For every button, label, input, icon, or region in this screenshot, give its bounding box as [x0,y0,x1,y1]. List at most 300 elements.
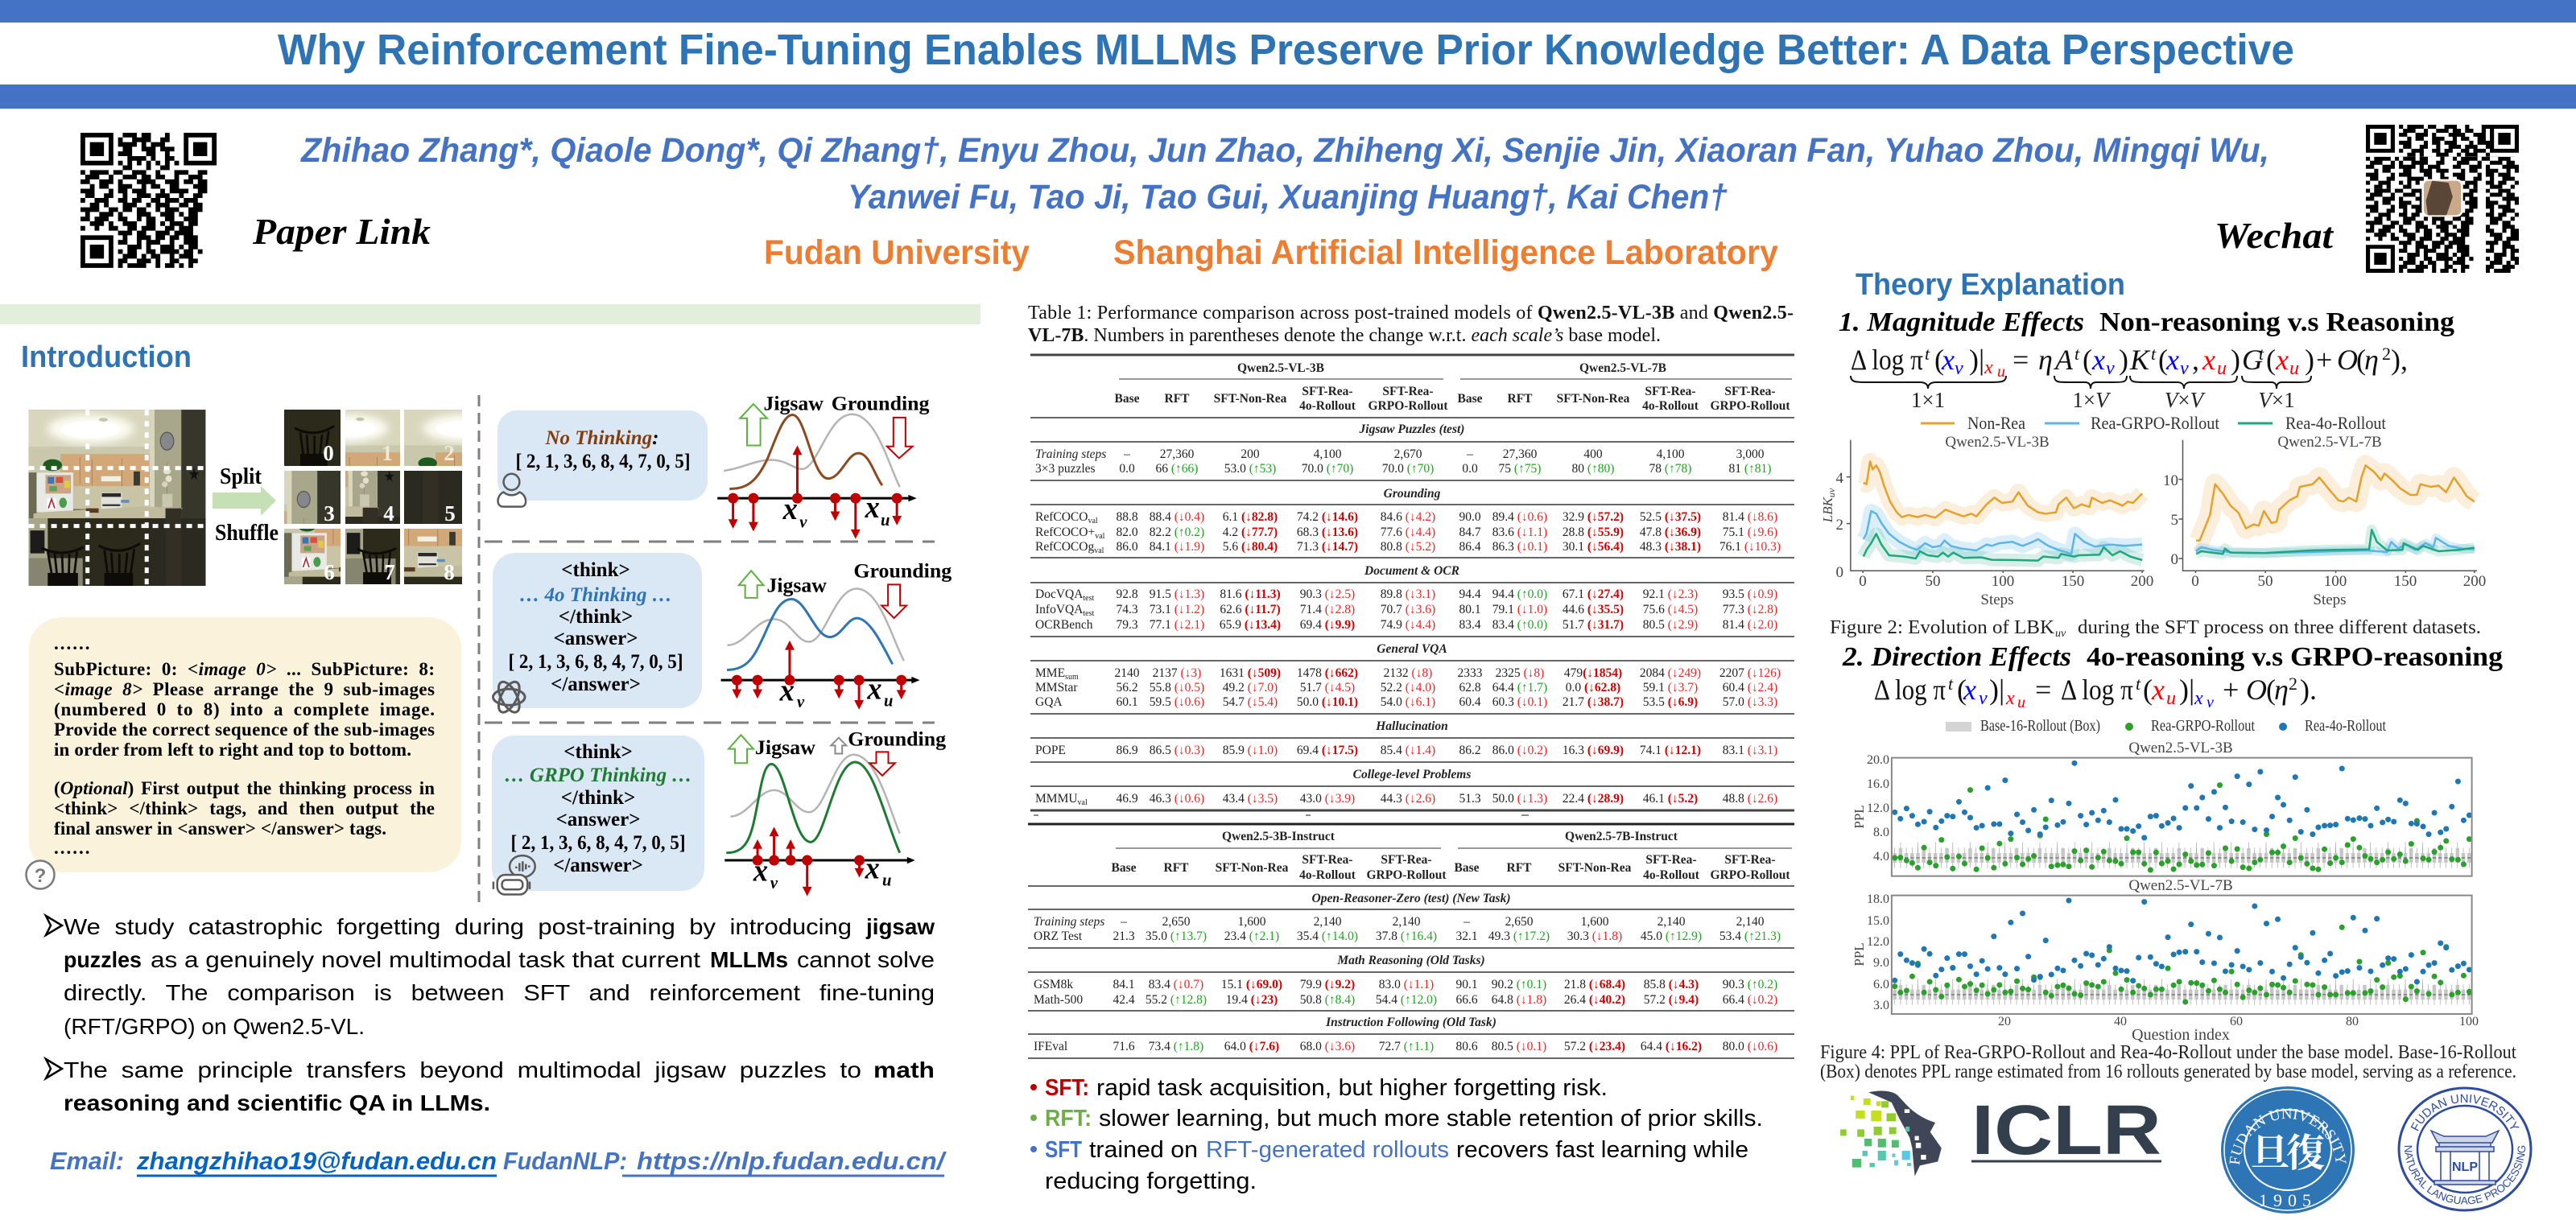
section: grounding: 6.1 (↓82.8) [1223,510,1278,524]
table 2 header: SFT-Rea- [1381,853,1432,867]
section: college-level problems: val [1078,798,1088,807]
intro bullets: MLLMs [710,947,788,972]
icon: question mark [26,861,55,888]
prompt text: Provide the correct sequence of the sub-images [54,719,435,740]
section: document and OCR: 77.3 (↓2.8) [1723,603,1777,616]
section: document and OCR: 94.4 [1459,587,1481,601]
formula: magnitude effects: t [1925,344,1930,364]
section: open-reasoner-zero: 53.4 (↑21.3) [1719,929,1781,943]
formula: direction effects: + [2223,674,2239,706]
image: shuffled puzzle tiles: 0 [323,441,334,465]
intro bullets: cannot solve [797,947,935,972]
chart: PPL Qwen2.5-VL-7B: 12.0 [1867,935,1889,949]
formula: direction effects: = [2035,674,2051,706]
section: college-level problems: 46.3 (↓0.6) [1150,792,1204,806]
section: grounding: 75.1 (↓9.6) [1723,526,1777,539]
section: general VQA: 2333 [1457,666,1483,680]
table header: SFT-Rea- [1382,385,1434,398]
chart: 4o thinking distribution shift: v [797,691,805,711]
intro bullets: math [873,1057,935,1082]
prompt text: in order from left to right and top to bottom. [54,740,411,760]
chart: GRPO thinking distribution shift: u [882,870,892,890]
formula: magnitude effects: x [1941,344,1955,376]
chart: PPL Qwen2.5-VL-3B: 20.0 [1867,753,1889,767]
section: instruction following: 73.4 (↑1.8) [1149,1040,1203,1053]
formula: magnitude effects: ) [2231,344,2240,376]
section: math reasoning: Math Reasoning (Old Tasks) [1336,954,1485,967]
section: instruction following: 80.6 [1455,1040,1478,1053]
section: college-level problems: 46.9 [1116,792,1138,806]
chart: PPL Qwen2.5-VL-7B: 6.0 [1873,978,1889,991]
QR code: wechat [2366,95,2564,273]
section: general VQA: 1478 (↓662) [1297,666,1358,680]
introduction band [0,304,980,324]
section: jigsaw puzzles: 53.0 (↑53) [1224,462,1276,476]
section: college-level problems: College-level Problems [1353,768,1471,781]
section: document and OCR: test [1083,594,1095,603]
formula underbraces and dimensions: 1×V [2072,388,2112,412]
table 2 header: GRPO-Rollout [1710,868,1790,882]
formula: magnitude effects: = [2013,344,2029,376]
formula: magnitude effects: A [2054,344,2074,376]
section: instruction following: 71.6 [1113,1040,1135,1053]
section: open-reasoner-zero: 2,650 [1505,915,1534,929]
prompt text: <think> </think> tags, and then output the [54,798,435,818]
logo: FudanNLP seal: FUDAN UNIVERSITY [2410,1094,2520,1131]
formula: magnitude effects: ( [2083,344,2092,376]
section: hallucination: 86.9 [1116,744,1138,757]
section: grounding: 4.2 (↓77.7) [1223,526,1278,539]
table header: RFT [1164,392,1190,406]
chart: PPL Qwen2.5-VL-3B [1852,740,2472,876]
GRPO thinking text: … GRPO Thinking … [505,765,691,786]
chart: no thinking distribution shift [717,393,929,539]
formula: magnitude effects: v [2180,358,2189,379]
bullet: SFT on RFT rollouts: recovers fast learning while [1456,1137,1748,1163]
chart: no thinking distribution shift: x [865,491,880,525]
section: general VQA: 60.4 [1459,695,1481,709]
section: grounding: val [1094,546,1104,555]
section: jigsaw puzzles: 81 (↑81) [1729,462,1771,476]
contact links [50,1147,947,1177]
section: general VQA: 54.0 (↓6.1) [1381,695,1435,709]
image: shuffled puzzle tiles [171,300,578,641]
chart: LBK evolution Qwen2.5-VL-7B [2163,434,2486,608]
chart: PPL Qwen2.5-VL-7B: 40 [2114,1015,2127,1028]
section: jigsaw puzzles: 400 [1583,447,1603,461]
image: shuffled puzzle tiles: 7 [384,560,395,584]
table 2 header: Base [1454,861,1480,875]
chart: 4o thinking distribution shift: x [866,672,882,707]
image: shuffled puzzle tiles: 6 [324,560,335,584]
chart: GRPO thinking distribution shift: Jigsaw [755,736,815,759]
section: instruction following: 80.0 (↓0.6) [1723,1040,1777,1053]
section: general VQA: 55.8 (↓0.5) [1150,681,1204,694]
logo: Fudan University seal: FUDAN UNIVERSITY [2230,1108,2347,1165]
section: math reasoning: 54.4 (↑12.0) [1376,993,1437,1007]
image: original kitchen photo with split grid [29,410,205,586]
section: grounding: Grounding [1384,487,1441,501]
table 2 header [1111,830,1790,882]
section: grounding: 76.1 (↓10.3) [1719,540,1781,554]
prompt text: (numbered 0 to 8) into a complete image. [54,699,435,719]
panel: GRPO thinking [492,736,704,891]
legend: PPL chart [1946,717,2386,735]
chart: no thinking distribution shift: u [881,509,890,530]
section: instruction following: 57.2 (↓23.4) [1564,1040,1625,1053]
chart: LBK evolution Qwen2.5-VL-7B: 150 [2394,573,2417,590]
section: grounding: 30.1 (↓56.4) [1563,540,1624,554]
heading: magnitude effects [1839,307,2454,337]
table 2 header: Qwen2.5-7B-Instruct [1565,830,1678,843]
figure 2 caption [1830,617,2481,640]
figure 2 caption: during the SFT process on three different datasets. [2078,617,2481,638]
section: open-reasoner-zero: – [1120,915,1127,929]
bullet: SFT: SFT: [1045,1075,1089,1101]
section: document and OCR: 75.6 (↓4.5) [1643,603,1698,616]
section: open-reasoner-zero: 49.3 (↑17.2) [1488,929,1550,943]
section: document and OCR: 80.5 (↓2.9) [1643,618,1698,632]
chart: LBK evolution Qwen2.5-VL-7B: 5 [2170,512,2178,529]
section: jigsaw puzzles: 4,100 [1314,447,1342,461]
formula: magnitude effects: t [2151,344,2157,364]
chart: GRPO thinking distribution shift: x [753,855,768,888]
arrow: split shuffle [213,486,276,516]
table 2 header: RFT [1164,861,1189,875]
section: math reasoning: 55.2 (↑12.8) [1146,993,1207,1007]
formula: magnitude effects: t [2074,344,2080,364]
table 2 header: Qwen2.5-3B-Instruct [1222,830,1335,843]
section: general VQA: 2084 (↓249) [1640,666,1701,680]
paper link label: Paper Link [252,211,431,252]
section: document and OCR: 51.7 (↓31.7) [1563,618,1624,632]
panel: no thinking [497,410,708,501]
icon: question mark: ? [35,865,46,887]
formula: magnitude effects: ( [1934,344,1944,376]
section: grounding: 48.3 (↓38.1) [1640,540,1701,554]
section: jigsaw puzzles: 75 (↑75) [1499,462,1541,476]
table header: SFT-Rea- [1302,385,1353,398]
section: open-reasoner-zero: 1,600 [1581,915,1609,929]
image: shuffled puzzle tiles: 8 [444,560,455,584]
GRPO thinking text: [ 2, 1, 3, 6, 8, 4, 7, 0, 5] [510,832,686,854]
section: open-reasoner-zero: 35.4 (↑14.0) [1297,929,1358,943]
4o thinking text: <answer> [554,628,638,649]
section: college-level problems: MMMU [1035,792,1078,806]
section: math reasoning: 83.0 (↓1.1) [1379,978,1434,991]
section: open-reasoner-zero: 23.4 (↑2.1) [1224,929,1279,943]
section: math reasoning [1034,954,1777,1007]
section: jigsaw puzzles: 27,360 [1503,447,1538,461]
bullet: SFT on RFT rollouts: RFT-generated rollouts [1206,1137,1449,1163]
section: math reasoning: 90.1 [1455,978,1478,991]
no thinking text: No Thinking: [544,427,659,449]
formula: magnitude effects: x [2091,344,2105,376]
formula: direction effects: ). [2300,674,2317,706]
section: open-reasoner-zero: 30.3 (↓1.8) [1567,929,1622,943]
bullet: SFT on RFT rollouts: reducing forgetting. [1045,1168,1257,1194]
section: hallucination: 69.4 (↓17.5) [1297,744,1358,757]
table header: GRPO-Rollout [1368,399,1448,413]
heading: direction effects: 4o-reasoning v.s GRPO-reasoning [2087,642,2503,672]
chart: no thinking distribution shift: Jigsaw [764,393,824,415]
section: general VQA: 52.2 (↓4.0) [1381,681,1435,694]
prompt text [54,633,435,858]
formula: magnitude effects: x [2202,344,2215,376]
section: college-level problems: 46.1 (↓5.2) [1643,792,1698,806]
section: general VQA: 60.4 (↓2.4) [1723,681,1777,694]
section: general VQA [1035,642,1781,709]
section: grounding: RefCOCOg [1035,540,1094,554]
section: general VQA: 60.1 [1116,695,1138,709]
prompt text: (Optional) First output the thinking process in [54,778,435,798]
formula: magnitude effects: v [2106,358,2115,379]
formula: magnitude effects: v [1955,358,1963,379]
formula: magnitude effects: ), [2391,344,2408,376]
GRPO thinking text: </think> [561,787,635,809]
prompt text: ...... [54,838,92,858]
section: math reasoning: 66.6 [1455,993,1478,1007]
table header [1114,361,1790,413]
section: grounding: 86.3 (↓0.1) [1492,540,1547,554]
formula: direction effects: ( [2266,674,2276,706]
legend: LBK chart [1921,413,2386,433]
section: math reasoning: 64.8 (↓1.8) [1492,993,1546,1007]
image: shuffled puzzle tiles: 2 [444,441,455,465]
formula: magnitude effects: x [2275,344,2289,376]
section: general VQA: 2325 (↓8) [1496,666,1544,680]
section: jigsaw puzzles: 70.0 (↑70) [1382,462,1434,476]
dashed horizontal divider 2 [485,721,935,724]
chart: GRPO thinking distribution shift: x [865,851,880,886]
section: general VQA: 57.0 (↓3.3) [1723,695,1777,709]
table header: SFT-Rea- [1724,385,1776,398]
section: hallucination: 85.4 (↓1.4) [1381,744,1435,757]
chart: LBK evolution Qwen2.5-VL-3B: Steps [1980,591,2014,608]
authors: Yanwei Fu, Tao Ji, Tao Gui, Xuanjing Huang†, Kai Chen† [848,178,1728,216]
chart: no thinking distribution shift: x [782,493,798,526]
section: open-reasoner-zero: 2,140 [1736,915,1765,929]
section: jigsaw puzzles: 27,360 [1160,447,1195,461]
chart: no thinking distribution shift: Grounding [832,393,929,415]
section: general VQA: MME [1035,666,1065,680]
section: document and OCR: 44.6 (↓35.5) [1563,603,1624,616]
section: open-reasoner-zero: Training steps [1034,915,1104,929]
section: document and OCR: 70.7 (↓3.6) [1381,603,1435,616]
chart: LBK evolution Qwen2.5-VL-3B: Qwen2.5-VL-3B [1945,434,2050,451]
section: jigsaw puzzles: 200 [1241,447,1260,461]
formula: magnitude effects: u [2217,358,2227,379]
bullet: SFT: rapid task acquisition, but higher forgetting risk. [1096,1075,1608,1101]
table 2 header: SFT-Non-Rea [1558,861,1632,875]
section: general VQA: 1631 (↓509) [1220,666,1281,680]
section: grounding: 84.7 [1459,526,1481,539]
legend: PPL chart: Rea-4o-Rollout [2305,717,2386,735]
section: math reasoning: 83.4 (↓0.7) [1149,978,1203,991]
section: jigsaw puzzles: 0.0 [1119,462,1135,476]
section: math reasoning: Math-500 [1034,993,1083,1007]
formula: magnitude effects: ( [2266,344,2276,376]
section: grounding: 80.8 (↓5.2) [1381,540,1435,554]
section: document and OCR: 74.9 (↓4.4) [1381,618,1435,632]
chart: LBK evolution Qwen2.5-VL-3B: 0 [1835,564,1843,581]
chart: LBK evolution Qwen2.5-VL-3B: 50 [1926,573,1940,590]
chart: LBK evolution Qwen2.5-VL-7B: 100 [2324,573,2347,590]
table 2 header: SFT-Non-Rea [1216,861,1289,875]
formula: direction effects: x [2005,688,2015,709]
logo: Fudan University seal: 1905 [2259,1190,2317,1210]
chart: GRPO thinking distribution shift: Grounding [848,728,946,751]
section: hallucination: 85.9 (↓1.0) [1223,744,1278,757]
section: general VQA: 21.7 (↓38.7) [1563,695,1624,709]
section: general VQA: 54.7 (↓5.4) [1223,695,1278,709]
table header: Qwen2.5-VL-7B [1579,361,1666,375]
formula underbraces and dimensions: 1×1 [1911,388,1945,412]
section: document and OCR: 67.1 (↓27.4) [1563,587,1624,601]
section: math reasoning: GSM8k [1034,978,1073,991]
section: document and OCR: test [1083,609,1095,618]
image: shuffled puzzle tiles: 4 [383,501,394,526]
chart: LBK evolution Qwen2.5-VL-7B: 10 [2163,472,2178,489]
legend: LBK chart: Rea-GRPO-Rollout [2091,413,2219,433]
formula: magnitude effects: O [2337,344,2358,376]
section: grounding: 86.0 [1116,540,1138,554]
section: open-reasoner-zero: – [1463,915,1470,929]
section: document and OCR: 93.5 (↓0.9) [1723,587,1777,601]
chart: LBK evolution Qwen2.5-VL-3B: LBK [1820,497,1835,522]
section: math reasoning: 79.9 (↓9.2) [1300,978,1355,991]
formula: magnitude effects: G [2242,344,2263,376]
takeaway bullets [1030,1075,1763,1194]
section: hallucination: 16.3 (↓69.9) [1563,744,1624,757]
section: general VQA: 2137 (↓3) [1153,666,1201,680]
section: general VQA: 2207 (↓126) [1719,666,1781,680]
prompt text: <image 8> Please arrange the 9 sub-images [54,679,435,699]
section: college-level problems: 51.3 [1459,792,1481,806]
section: instruction following: 64.0 (↓7.6) [1224,1040,1279,1053]
table header: SFT-Non-Rea [1214,392,1287,406]
section: general VQA: 56.2 [1116,681,1138,694]
section: general VQA: GQA [1035,695,1063,709]
formula: magnitude effects: x [2165,344,2179,376]
formula: magnitude effects [1851,344,2408,381]
section: general VQA: 62.8 [1459,681,1481,694]
section: grounding: 90.0 [1459,510,1481,524]
section: math reasoning: 19.4 (↓23) [1226,993,1278,1007]
section: document and OCR: OCRBench [1035,618,1093,632]
section: jigsaw puzzles: Jigsaw Puzzles (test) [1359,422,1464,436]
section: document and OCR: 89.8 (↓3.1) [1381,587,1435,601]
affiliations: Shanghai Artificial Intelligence Laboratory [1113,233,1778,272]
section: math reasoning: 57.2 (↓9.4) [1644,993,1699,1007]
section: grounding: 84.6 (↓4.2) [1381,510,1435,524]
section: open-reasoner-zero: 2,140 [1657,915,1686,929]
chart: LBK evolution Qwen2.5-VL-3B: 200 [2131,573,2153,590]
chart: LBK evolution Qwen2.5-VL-7B: Qwen2.5-VL-7B [2277,434,2382,451]
section: document and OCR: 79.3 [1116,618,1138,632]
authors [299,131,2269,216]
section: open-reasoner-zero [1034,892,1781,943]
chart: PPL Qwen2.5-VL-3B: Qwen2.5-VL-3B [2128,740,2233,756]
section: instruction following: IFEval [1034,1040,1067,1053]
dashed vertical divider [478,395,480,904]
section: math reasoning: 66.4 (↓0.2) [1723,993,1777,1007]
section: grounding: 83.6 (↓1.1) [1492,526,1547,539]
section: grounding: 5.6 (↓80.4) [1223,540,1278,554]
chart: LBK evolution Qwen2.5-VL-3B: uv [1826,488,1837,497]
chart: 4o thinking distribution shift [721,560,952,711]
section: grounding: 28.8 (↓55.9) [1563,526,1624,539]
section: general VQA: 2132 (↓8) [1384,666,1432,680]
contact links: Email: [50,1147,124,1175]
chart: PPL Qwen2.5-VL-7B: 80 [2346,1015,2359,1028]
table 1: performance of Qwen2.5-VL [1030,355,1794,810]
section: instruction following [1034,1016,1777,1053]
section: grounding: 52.5 (↓37.5) [1640,510,1701,524]
chart: PPL Qwen2.5-VL-7B: 15.0 [1867,914,1889,928]
intro bullets: We study catastrophic forgetting during post-training by introducing [64,914,852,939]
icon: robot with speech bubble [493,855,535,895]
section: open-reasoner-zero: ORZ Test [1034,929,1083,943]
table 2 header: SFT-Rea- [1724,853,1776,867]
section: grounding: 82.0 [1116,526,1138,539]
heading: theory explanation: Theory Explanation [1856,268,2125,302]
formula: magnitude effects: ( [2158,344,2168,376]
section: general VQA: 0.0 (↓62.8) [1566,681,1620,694]
4o thinking text: </think> [559,606,633,628]
table 2 header: SFT-Rea- [1645,853,1697,867]
formula: direction effects: u [2017,694,2025,711]
section: general VQA: 60.3 (↓0.1) [1492,695,1547,709]
chart: LBK evolution Qwen2.5-VL-7B: 50 [2257,573,2273,590]
section: math reasoning: 15.1 (↓69.0) [1221,978,1282,991]
prompt box [29,617,461,872]
no thinking text: [ 2, 1, 3, 6, 8, 4, 7, 0, 5] [515,451,691,472]
chart: PPL Qwen2.5-VL-7B [1852,877,2479,1044]
legend: LBK chart: Rea-4o-Rollout [2285,413,2386,433]
section: jigsaw puzzles: – [1123,447,1130,461]
bullet: SFT on RFT rollouts: SFT [1045,1137,1082,1163]
formula: magnitude effects: K [2129,344,2151,376]
section: document and OCR: 92.1 (↓2.3) [1643,587,1698,601]
section: open-reasoner-zero: Open-Reasoner-Zero (test) (New Task) [1312,892,1510,905]
chart: LBK evolution Qwen2.5-VL-7B: 0 [2191,573,2199,590]
section: jigsaw puzzles: 70.0 (↑70) [1302,462,1353,476]
section: open-reasoner-zero: 2,140 [1314,915,1342,929]
formula: direction effects: v [1979,688,1988,709]
formula: magnitude effects: ( [2356,344,2366,376]
heading: magnitude effects: 1. Magnitude Effects [1839,307,2084,337]
section: general VQA: 64.4 (↑1.7) [1492,681,1547,694]
formula: direction effects: η [2274,674,2289,706]
section: jigsaw puzzles: 66 (↑66) [1156,462,1198,476]
formula: direction effects: ( [2143,674,2153,706]
section: grounding: 82.2 (↑0.2) [1150,526,1204,539]
chart: LBK evolution Qwen2.5-VL-3B: 4 [1835,470,1843,487]
section: document and OCR: 81.4 (↓2.0) [1723,618,1777,632]
formula: magnitude effects: 2 [2382,344,2391,364]
section: math reasoning: 26.4 (↓40.2) [1564,993,1625,1007]
section: grounding: val [1088,517,1098,526]
section: grounding: RefCOCO+ [1035,526,1095,539]
logo: FudanNLP seal [2397,1086,2533,1212]
chart: PPL Qwen2.5-VL-3B: 4.0 [1873,850,1889,863]
section: hallucination: 86.2 [1459,744,1481,757]
section: instruction following: 68.0 (↓3.6) [1300,1040,1355,1053]
chart: LBK evolution Qwen2.5-VL-3B: 100 [1992,573,2014,590]
section: math reasoning: 42.4 [1113,993,1135,1007]
4o thinking text [509,559,683,695]
